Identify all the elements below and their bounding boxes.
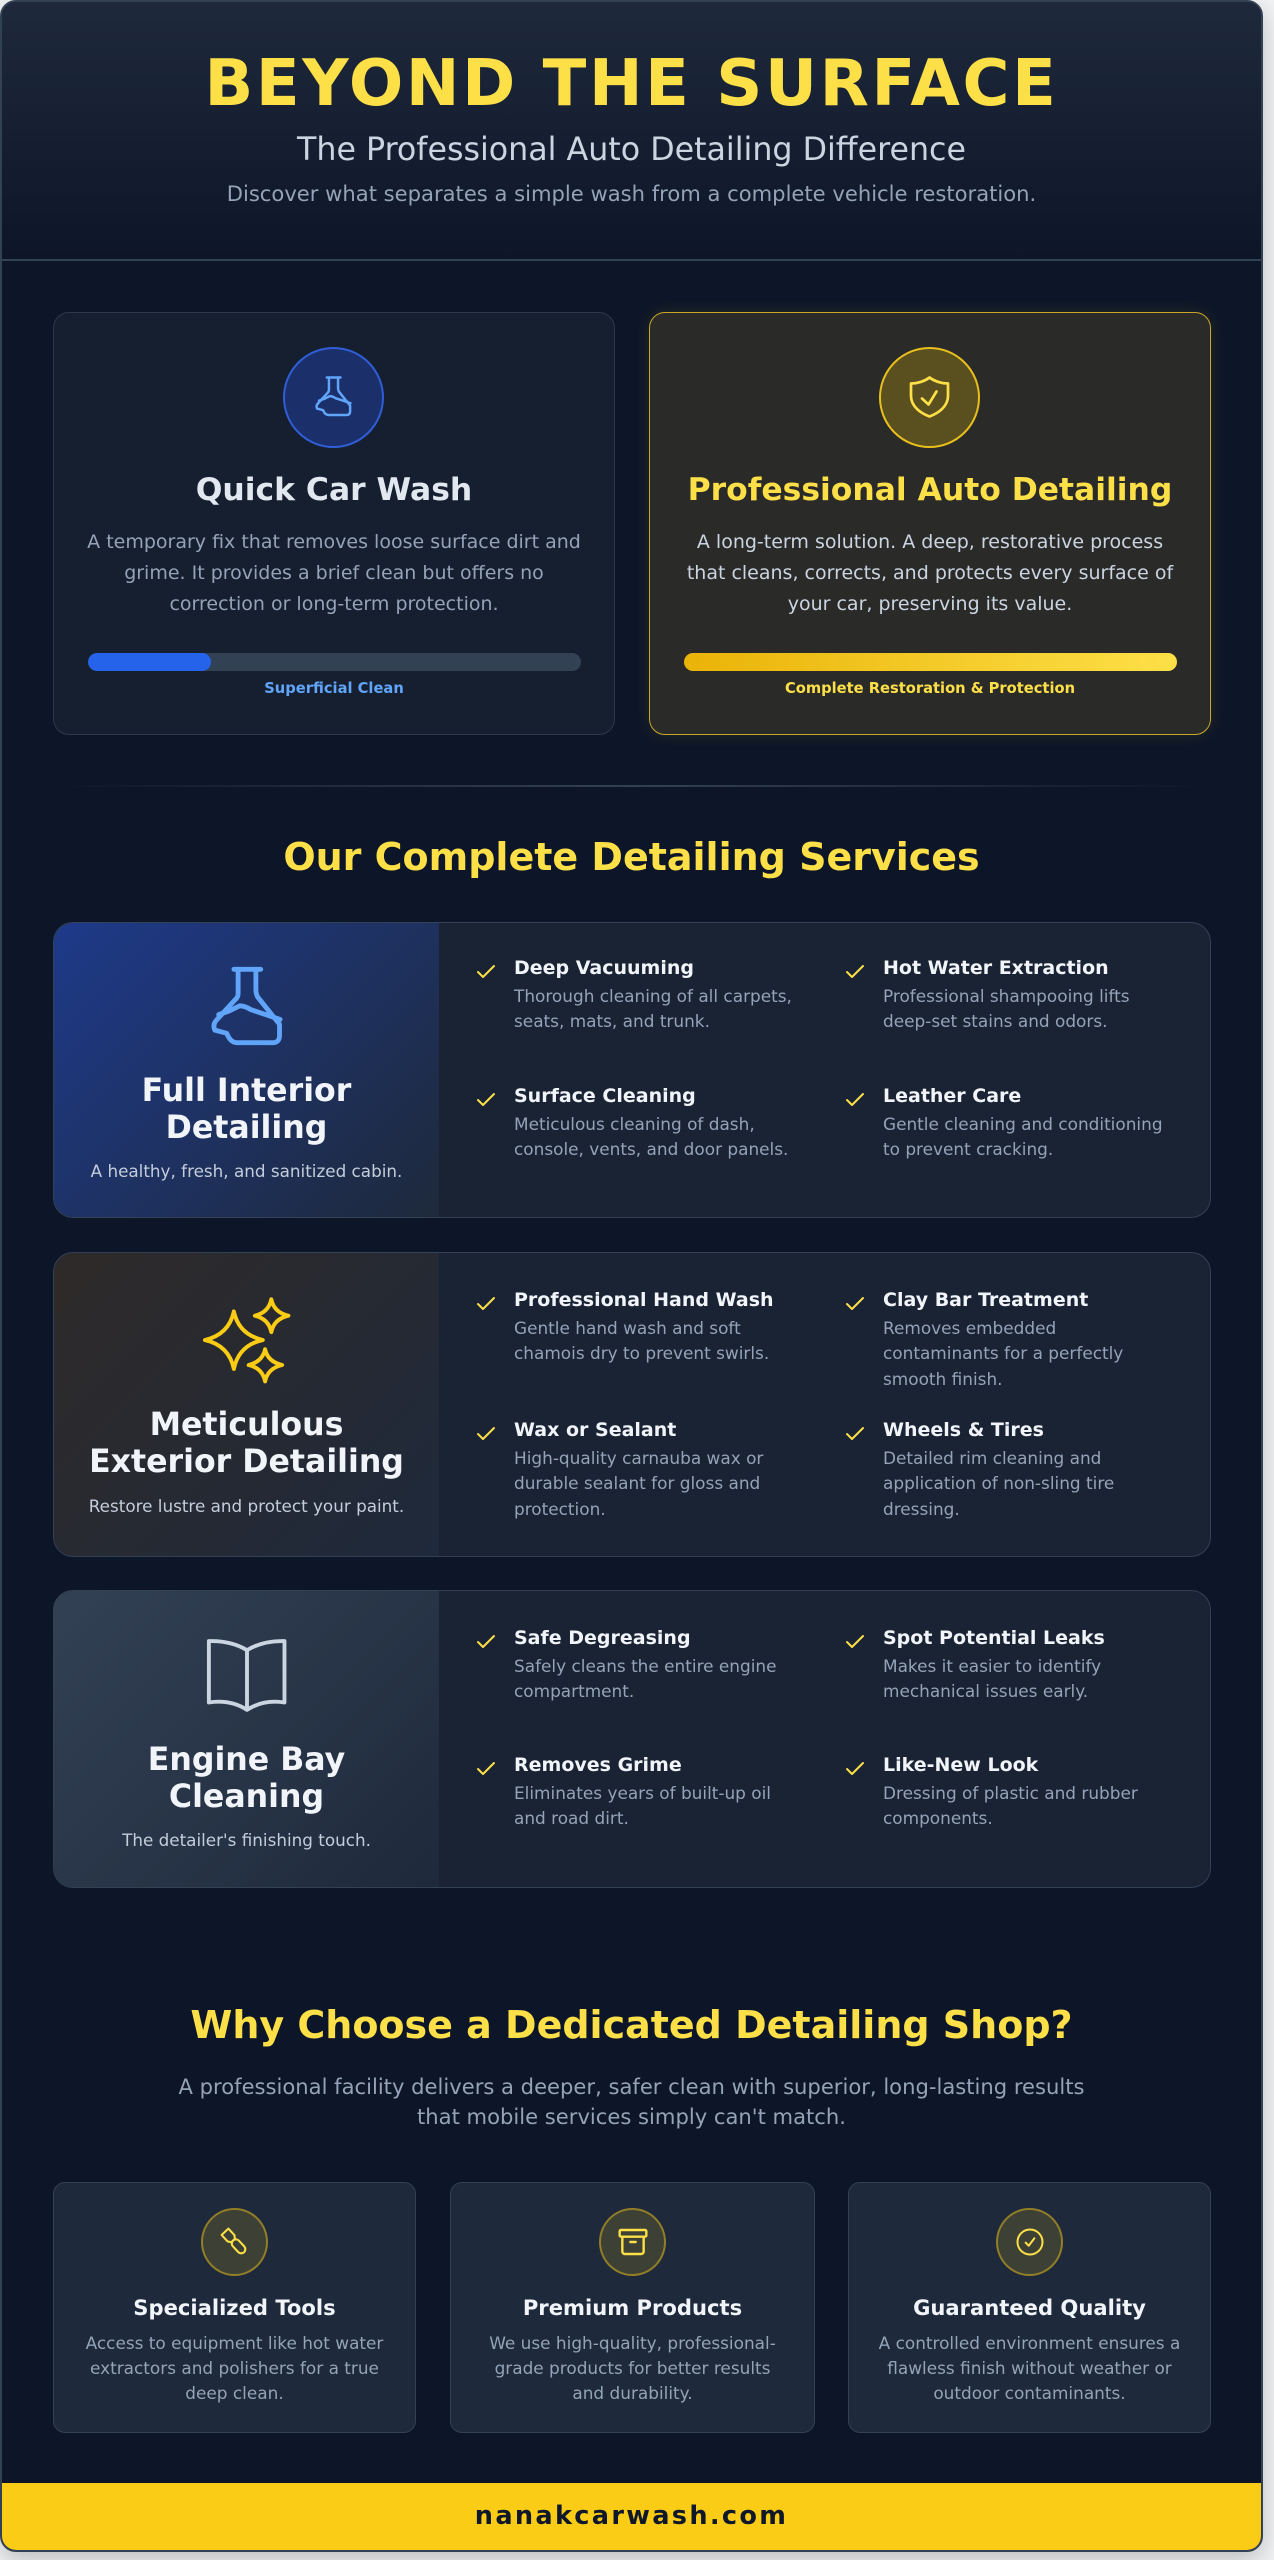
header: [0, 0, 1263, 261]
item: leaks: Spot Potential Leaks: [883, 1627, 1105, 1649]
item: surface cleaning: Meticulous cleaning of dash,: [514, 1114, 755, 1134]
footer: [0, 2483, 1263, 2552]
heading: [142, 1073, 352, 1146]
item: wax: protection.: [514, 1499, 606, 1519]
description: [86, 2333, 384, 2403]
heading: Specialized Tools: [133, 2295, 336, 2320]
benefit: specialized tools: [53, 2182, 416, 2433]
section heading: services: Our Complete Detailing Services: [283, 835, 980, 879]
item: degreasing: compartment.: [514, 1681, 634, 1701]
item: grime: Removes Grime: [514, 1754, 682, 1776]
item: wheels: dressing.: [883, 1499, 960, 1519]
item: degreasing: Safe Degreasing: [514, 1627, 691, 1649]
progress bar: 100 percent: [684, 653, 1177, 671]
item: deep vacuuming: [477, 957, 792, 1031]
item: wheels: application of non-sling tire: [883, 1473, 1114, 1493]
description: Access to equipment like hot water: [86, 2333, 383, 2353]
item: wax: High-quality carnauba wax or: [514, 1448, 763, 1468]
section intro: A professional facility delivers a deeper, safer clean with superior, long-lasting results: [178, 2074, 1084, 2099]
service row: interior: [53, 922, 1211, 1218]
item: clay bar: smooth finish.: [883, 1369, 1003, 1389]
item: clay bar: contaminants for a perfectly: [883, 1343, 1123, 1363]
card description: [687, 531, 1174, 615]
item: leather care: [846, 1085, 1163, 1159]
description: grade products for better results: [495, 2358, 770, 2378]
card description: A long-term solution. A deep, restorative process: [697, 531, 1163, 553]
item: wheels: Detailed rim cleaning and: [883, 1448, 1101, 1468]
item: deep vacuuming: Thorough cleaning of all carpets,: [514, 986, 792, 1006]
item: degreasing: Safely cleans the entire engine: [514, 1656, 777, 1676]
icon: blue flask: [283, 347, 384, 448]
heading: Full Interior: [142, 1073, 351, 1109]
card description: correction or long-term protection.: [169, 593, 499, 615]
service row: engine bay: [53, 1590, 1211, 1888]
item: hand wash: chamois dry to prevent swirls.: [514, 1343, 769, 1363]
item: degreasing: [477, 1627, 777, 1701]
panel: quick car wash: [53, 312, 615, 735]
card description: that cleans, corrects, and protects every surface of: [687, 562, 1173, 584]
icon: book: [206, 1639, 286, 1712]
description: extractors and polishers for a true: [90, 2358, 379, 2378]
benefit: guaranteed quality: [848, 2182, 1211, 2433]
description: We use high-quality, professional-: [489, 2333, 776, 2353]
item: hand wash: Professional Hand Wash: [514, 1289, 774, 1311]
item: hot water extraction: [846, 957, 1130, 1031]
progress label: Complete Restoration & Protection: [785, 680, 1075, 697]
item: surface cleaning: [477, 1085, 788, 1159]
item: like-new: Dressing of plastic and rubber: [883, 1783, 1138, 1803]
item: hot water extraction: Professional shampooing lifts: [883, 986, 1130, 1006]
engine bay summary: [54, 1591, 439, 1887]
description: flawless finish without weather or: [887, 2358, 1172, 2378]
heading: Premium Products: [523, 2295, 742, 2320]
heading: Meticulous: [150, 1407, 343, 1443]
item: like-new: components.: [883, 1808, 993, 1828]
item: wax: durable sealant for gloss and: [514, 1473, 760, 1493]
interior summary: [54, 923, 439, 1217]
item: surface cleaning: Surface Cleaning: [514, 1085, 696, 1107]
title: BEYOND THE SURFACE: [205, 47, 1058, 121]
service row: exterior: [53, 1252, 1211, 1557]
item: leaks: Makes it easier to identify: [883, 1656, 1101, 1676]
section heading: why choose: Why Choose a Dedicated Detailing Shop?: [190, 2003, 1073, 2047]
section intro: [178, 2074, 1084, 2129]
description: [489, 2333, 776, 2403]
item: grime: [477, 1754, 771, 1828]
item: hot water extraction: deep-set stains and odors.: [883, 1011, 1108, 1031]
icon: flask: [212, 966, 283, 1046]
heading: Detailing: [166, 1110, 327, 1146]
website address: nanakcarwash.com: [475, 2501, 788, 2531]
icon: circle check: [996, 2208, 1063, 2276]
progress bar: 25 percent: [88, 653, 581, 671]
card description: your car, preserving its value.: [788, 593, 1072, 615]
description: outdoor contaminants.: [933, 2383, 1126, 2403]
card heading: Professional Auto Detailing: [688, 472, 1172, 508]
panel: professional auto detailing: [649, 312, 1211, 735]
caption: Restore lustre and protect your paint.: [89, 1496, 404, 1516]
description: and durability.: [572, 2383, 693, 2403]
subtitle: The Professional Auto Detailing Difference: [297, 132, 966, 168]
item: surface cleaning: console, vents, and door panels.: [514, 1139, 788, 1159]
item: leaks: [846, 1627, 1105, 1701]
item: grime: Eliminates years of built-up oil: [514, 1783, 771, 1803]
heading: [89, 1407, 404, 1480]
caption: The detailer's finishing touch.: [122, 1830, 371, 1850]
item: hot water extraction: Hot Water Extraction: [883, 957, 1109, 979]
progress label: Superficial Clean: [264, 680, 404, 697]
icon: sparkles: [202, 1297, 290, 1384]
icon: archive box: [599, 2208, 666, 2276]
description: A controlled environment ensures a: [879, 2333, 1180, 2353]
item: clay bar: Clay Bar Treatment: [883, 1289, 1088, 1311]
item: leather care: Leather Care: [883, 1085, 1021, 1107]
heading: [148, 1742, 345, 1815]
caption: A healthy, fresh, and sanitized cabin.: [91, 1161, 402, 1181]
benefit: premium products: [450, 2182, 815, 2433]
item: grime: and road dirt.: [514, 1808, 629, 1828]
card description: A temporary fix that removes loose surface dirt and: [87, 531, 581, 553]
item: wax: [477, 1419, 764, 1519]
heading: Cleaning: [169, 1779, 324, 1815]
heading: Exterior Detailing: [89, 1444, 404, 1480]
item: clay bar: [846, 1289, 1123, 1389]
item: wheels: Wheels & Tires: [883, 1419, 1044, 1441]
item: hand wash: Gentle hand wash and soft: [514, 1318, 741, 1338]
icon: tools: [201, 2208, 268, 2276]
item: wax: Wax or Sealant: [514, 1419, 676, 1441]
item: clay bar: Removes embedded: [883, 1318, 1056, 1338]
icon: shield check: [879, 347, 980, 448]
description: deep clean.: [185, 2383, 284, 2403]
card heading: Quick Car Wash: [196, 472, 472, 508]
card description: grime. It provides a brief clean but offers no: [124, 562, 544, 584]
exterior summary: [54, 1253, 439, 1556]
section intro: that mobile services simply can't match.: [417, 2104, 846, 2129]
heading: Engine Bay: [148, 1742, 345, 1778]
item: deep vacuuming: Deep Vacuuming: [514, 957, 694, 979]
item: like-new: Like-New Look: [883, 1754, 1038, 1776]
item: hand wash: [477, 1289, 774, 1363]
item: leather care: Gentle cleaning and conditioning: [883, 1114, 1163, 1134]
card description: [87, 531, 581, 615]
item: wheels: [846, 1419, 1114, 1519]
description: [878, 2333, 1180, 2403]
tagline: Discover what separates a simple wash from a complete vehicle restoration.: [227, 181, 1036, 206]
item: leather care: to prevent cracking.: [883, 1139, 1053, 1159]
item: like-new: [846, 1754, 1138, 1828]
item: leaks: mechanical issues early.: [883, 1681, 1088, 1701]
item: deep vacuuming: seats, mats, and trunk.: [514, 1011, 710, 1031]
heading: Guaranteed Quality: [913, 2295, 1146, 2320]
